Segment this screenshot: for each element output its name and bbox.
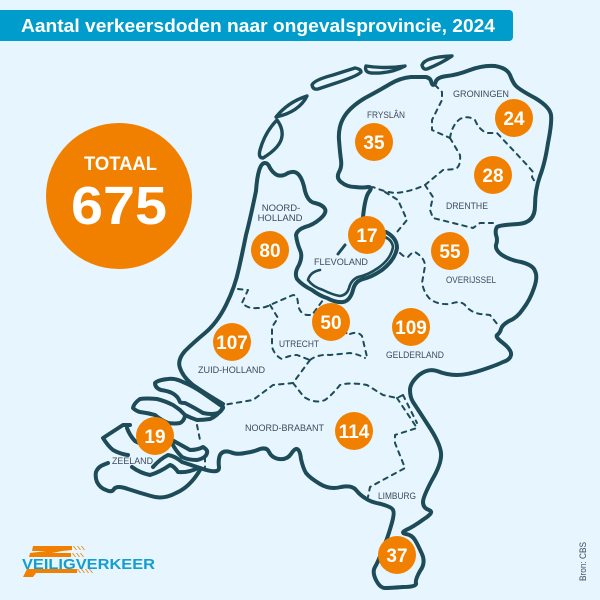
- Fryslan: [355, 110, 405, 161]
- Limburg: LIMBURG: [378, 491, 416, 502]
- source note: Bron: CBS: [578, 542, 589, 581]
- Limburg: [378, 491, 416, 574]
- Fryslan: 35: [363, 133, 385, 154]
- title: Aantal verkeersdoden naar ongevalsprovincie, 2024: [21, 15, 496, 36]
- Noord-Holland: [251, 203, 303, 269]
- Overijssel: OVERIJSSEL: [446, 275, 496, 286]
- Noord-Holland: NOORD-: [262, 203, 300, 214]
- Utrecht: [279, 303, 350, 350]
- Overijssel: 55: [439, 242, 461, 263]
- Groningen: [453, 89, 533, 137]
- Zeeland: [112, 417, 174, 467]
- Flevoland shore: [308, 237, 393, 296]
- Noord-Brabant: NOORD-BRABANT: [245, 423, 324, 434]
- Noord-Holland: 80: [259, 241, 281, 262]
- logo: Veilig Verkeer: VEILIGVERKEER: [22, 556, 155, 573]
- Zeeland islands: [96, 379, 223, 497]
- Drenthe: [446, 156, 512, 212]
- Fryslan: FRYSLÂN: [367, 110, 405, 121]
- Zuid-Holland: ZUID-HOLLAND: [198, 365, 265, 376]
- Flevoland: [314, 216, 386, 268]
- total badge: TOTAAL: [84, 153, 157, 175]
- Gelderland: [386, 308, 444, 361]
- Zuid-Holland: 107: [216, 333, 248, 354]
- Drenthe: DRENTHE: [446, 201, 488, 212]
- Zeeland: ZEELAND: [112, 456, 153, 467]
- title: [0, 10, 513, 41]
- mainland coast: [179, 163, 397, 404]
- Limburg: 37: [386, 546, 408, 567]
- Noord-Holland: HOLLAND: [258, 213, 303, 224]
- Flevoland: 17: [356, 226, 378, 247]
- total badge: [46, 123, 192, 269]
- total badge: 675: [71, 176, 167, 236]
- Gelderland: GELDERLAND: [386, 350, 444, 361]
- Gelderland: 109: [395, 318, 427, 339]
- Zuid-Holland: [198, 323, 265, 376]
- logo: Veilig Verkeer: [22, 546, 155, 577]
- Utrecht: 50: [320, 313, 342, 334]
- Overijssel: [431, 232, 496, 286]
- map of the Netherlands: [96, 56, 551, 588]
- Groningen: 24: [503, 109, 525, 130]
- Zeeland: 19: [144, 427, 166, 448]
- Utrecht: UTRECHT: [279, 339, 319, 350]
- Flevoland: FLEVOLAND: [314, 257, 368, 268]
- Drenthe: 28: [482, 166, 504, 187]
- Wadden islands: [259, 56, 452, 158]
- Noord-Brabant: 114: [339, 422, 370, 443]
- Noord-Brabant: [245, 412, 373, 450]
- Groningen: GRONINGEN: [453, 89, 509, 100]
- province borders: [197, 85, 535, 497]
